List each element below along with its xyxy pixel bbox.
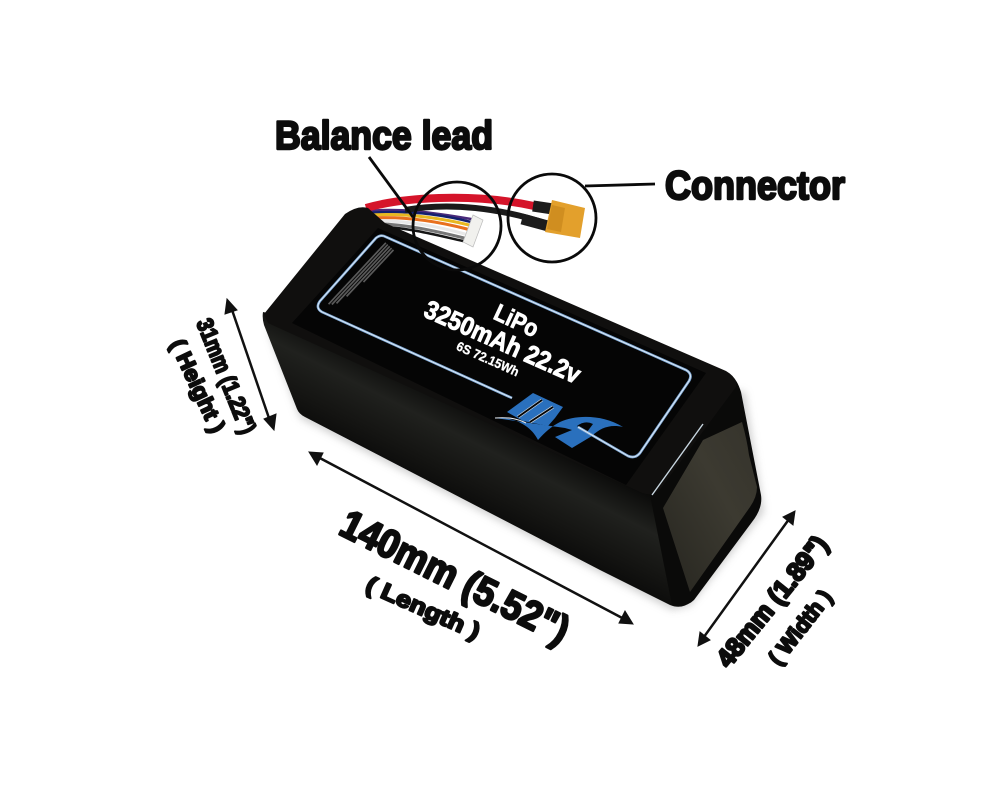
battery body bbox=[263, 207, 761, 607]
logo bbox=[495, 393, 623, 448]
height caption: ( Height ) bbox=[165, 335, 230, 436]
dimension: height bbox=[165, 299, 276, 437]
label outline bbox=[318, 236, 690, 457]
width value: 48mm (1.89") bbox=[710, 530, 834, 673]
capacity and voltage: 3250mAh 22.2v bbox=[420, 294, 586, 390]
heat shrink bbox=[533, 206, 553, 209]
logo top block bbox=[507, 393, 563, 426]
arrow bbox=[309, 452, 633, 624]
leader line bbox=[585, 184, 655, 186]
edge highlight bbox=[652, 424, 703, 495]
cell count and watt hours: 6S 72.15Wh bbox=[454, 338, 522, 379]
length caption: ( Length ) bbox=[362, 571, 484, 644]
end face outer bbox=[650, 374, 761, 606]
logo swoosh bbox=[495, 417, 623, 448]
icon: balance plug bbox=[463, 215, 483, 247]
wires and connectors bbox=[366, 198, 585, 247]
dimension: length bbox=[309, 452, 633, 653]
label area bbox=[292, 228, 706, 485]
front face bbox=[263, 312, 700, 607]
callout: balance lead bbox=[275, 114, 501, 270]
balance lead wires bbox=[366, 210, 471, 241]
callout: connector bbox=[508, 164, 845, 262]
black power wire bbox=[405, 206, 548, 224]
top face bbox=[264, 207, 736, 494]
end face panel bbox=[663, 422, 757, 592]
battery shadow bbox=[268, 330, 764, 610]
dimension: width bbox=[698, 511, 837, 673]
circle bbox=[508, 174, 596, 262]
leader line bbox=[369, 157, 413, 217]
icon: XT connector bbox=[545, 200, 585, 238]
LiPo: LiPo bbox=[490, 299, 543, 343]
caution text block bbox=[328, 242, 394, 312]
arrow bbox=[698, 511, 795, 646]
length value: 140mm (5.52") bbox=[333, 502, 576, 653]
battery label text bbox=[420, 294, 586, 390]
arrow bbox=[225, 299, 276, 430]
red power wire bbox=[366, 198, 534, 208]
heading: Connector bbox=[665, 164, 845, 208]
height value: 31mm (1.22") bbox=[192, 315, 261, 437]
width caption: ( Width ) bbox=[763, 585, 837, 670]
circle bbox=[413, 182, 501, 270]
heading: Balance lead bbox=[275, 114, 493, 158]
